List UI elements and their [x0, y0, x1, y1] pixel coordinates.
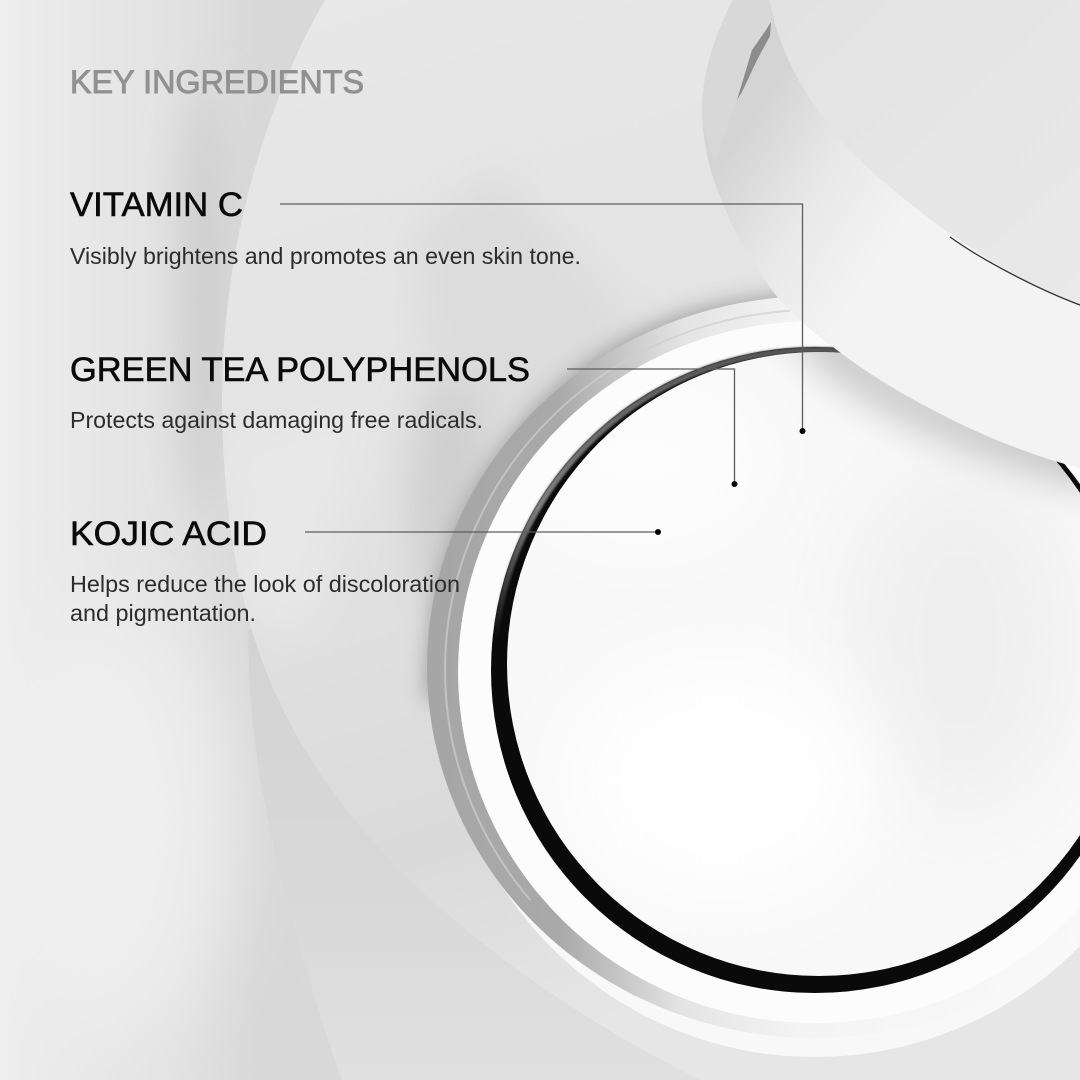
kojic acid description second line: and pigmentation. — [70, 600, 256, 626]
powder shading — [510, 310, 1080, 910]
ingredient: kojic acid — [70, 515, 661, 626]
ingredient: green tea polyphenols — [70, 351, 738, 487]
ingredient: vitamin c — [70, 186, 806, 434]
title: KEY INGREDIENTS — [70, 64, 364, 100]
ring worn upper edge — [494, 345, 840, 630]
green tea description: Protects against damaging free radicals. — [70, 407, 483, 433]
compact lid — [702, 0, 1080, 468]
kojic acid description: Helps reduce the look of discoloration — [70, 571, 460, 597]
pan white inner rim — [458, 321, 1080, 1023]
black gap ring — [491, 347, 1080, 993]
kojic acid heading: KOJIC ACID — [70, 515, 267, 553]
vitamin c heading: VITAMIN C — [70, 186, 243, 224]
large background disc — [222, 0, 1080, 1080]
lid top dark edge — [950, 237, 1080, 305]
white powder pad — [507, 352, 1080, 976]
lid dark glint — [737, 22, 771, 100]
lid reflection — [702, 0, 772, 160]
compact pan — [427, 296, 1080, 1057]
pan outer white lip — [443, 313, 1080, 1057]
vitamin c marker dot — [800, 428, 806, 434]
pan translucent grey rim — [427, 296, 1080, 1038]
vitamin c description: Visibly brightens and promotes an even skin tone. — [70, 243, 581, 269]
green tea heading: GREEN TEA POLYPHENOLS — [70, 351, 530, 389]
pan rim inner step — [444, 310, 791, 900]
vitamin c leader line — [280, 204, 802, 431]
pan contact shadow — [427, 296, 800, 700]
lid top surface — [770, 0, 1080, 305]
lower overlapping sheet — [248, 600, 760, 1080]
background soft shading — [0, 80, 231, 1040]
kojic acid leader line — [305, 531, 658, 533]
green tea leader line — [567, 369, 734, 484]
green tea marker dot — [732, 481, 738, 487]
kojic acid marker dot — [655, 529, 661, 535]
lid outer side — [702, 0, 1080, 468]
